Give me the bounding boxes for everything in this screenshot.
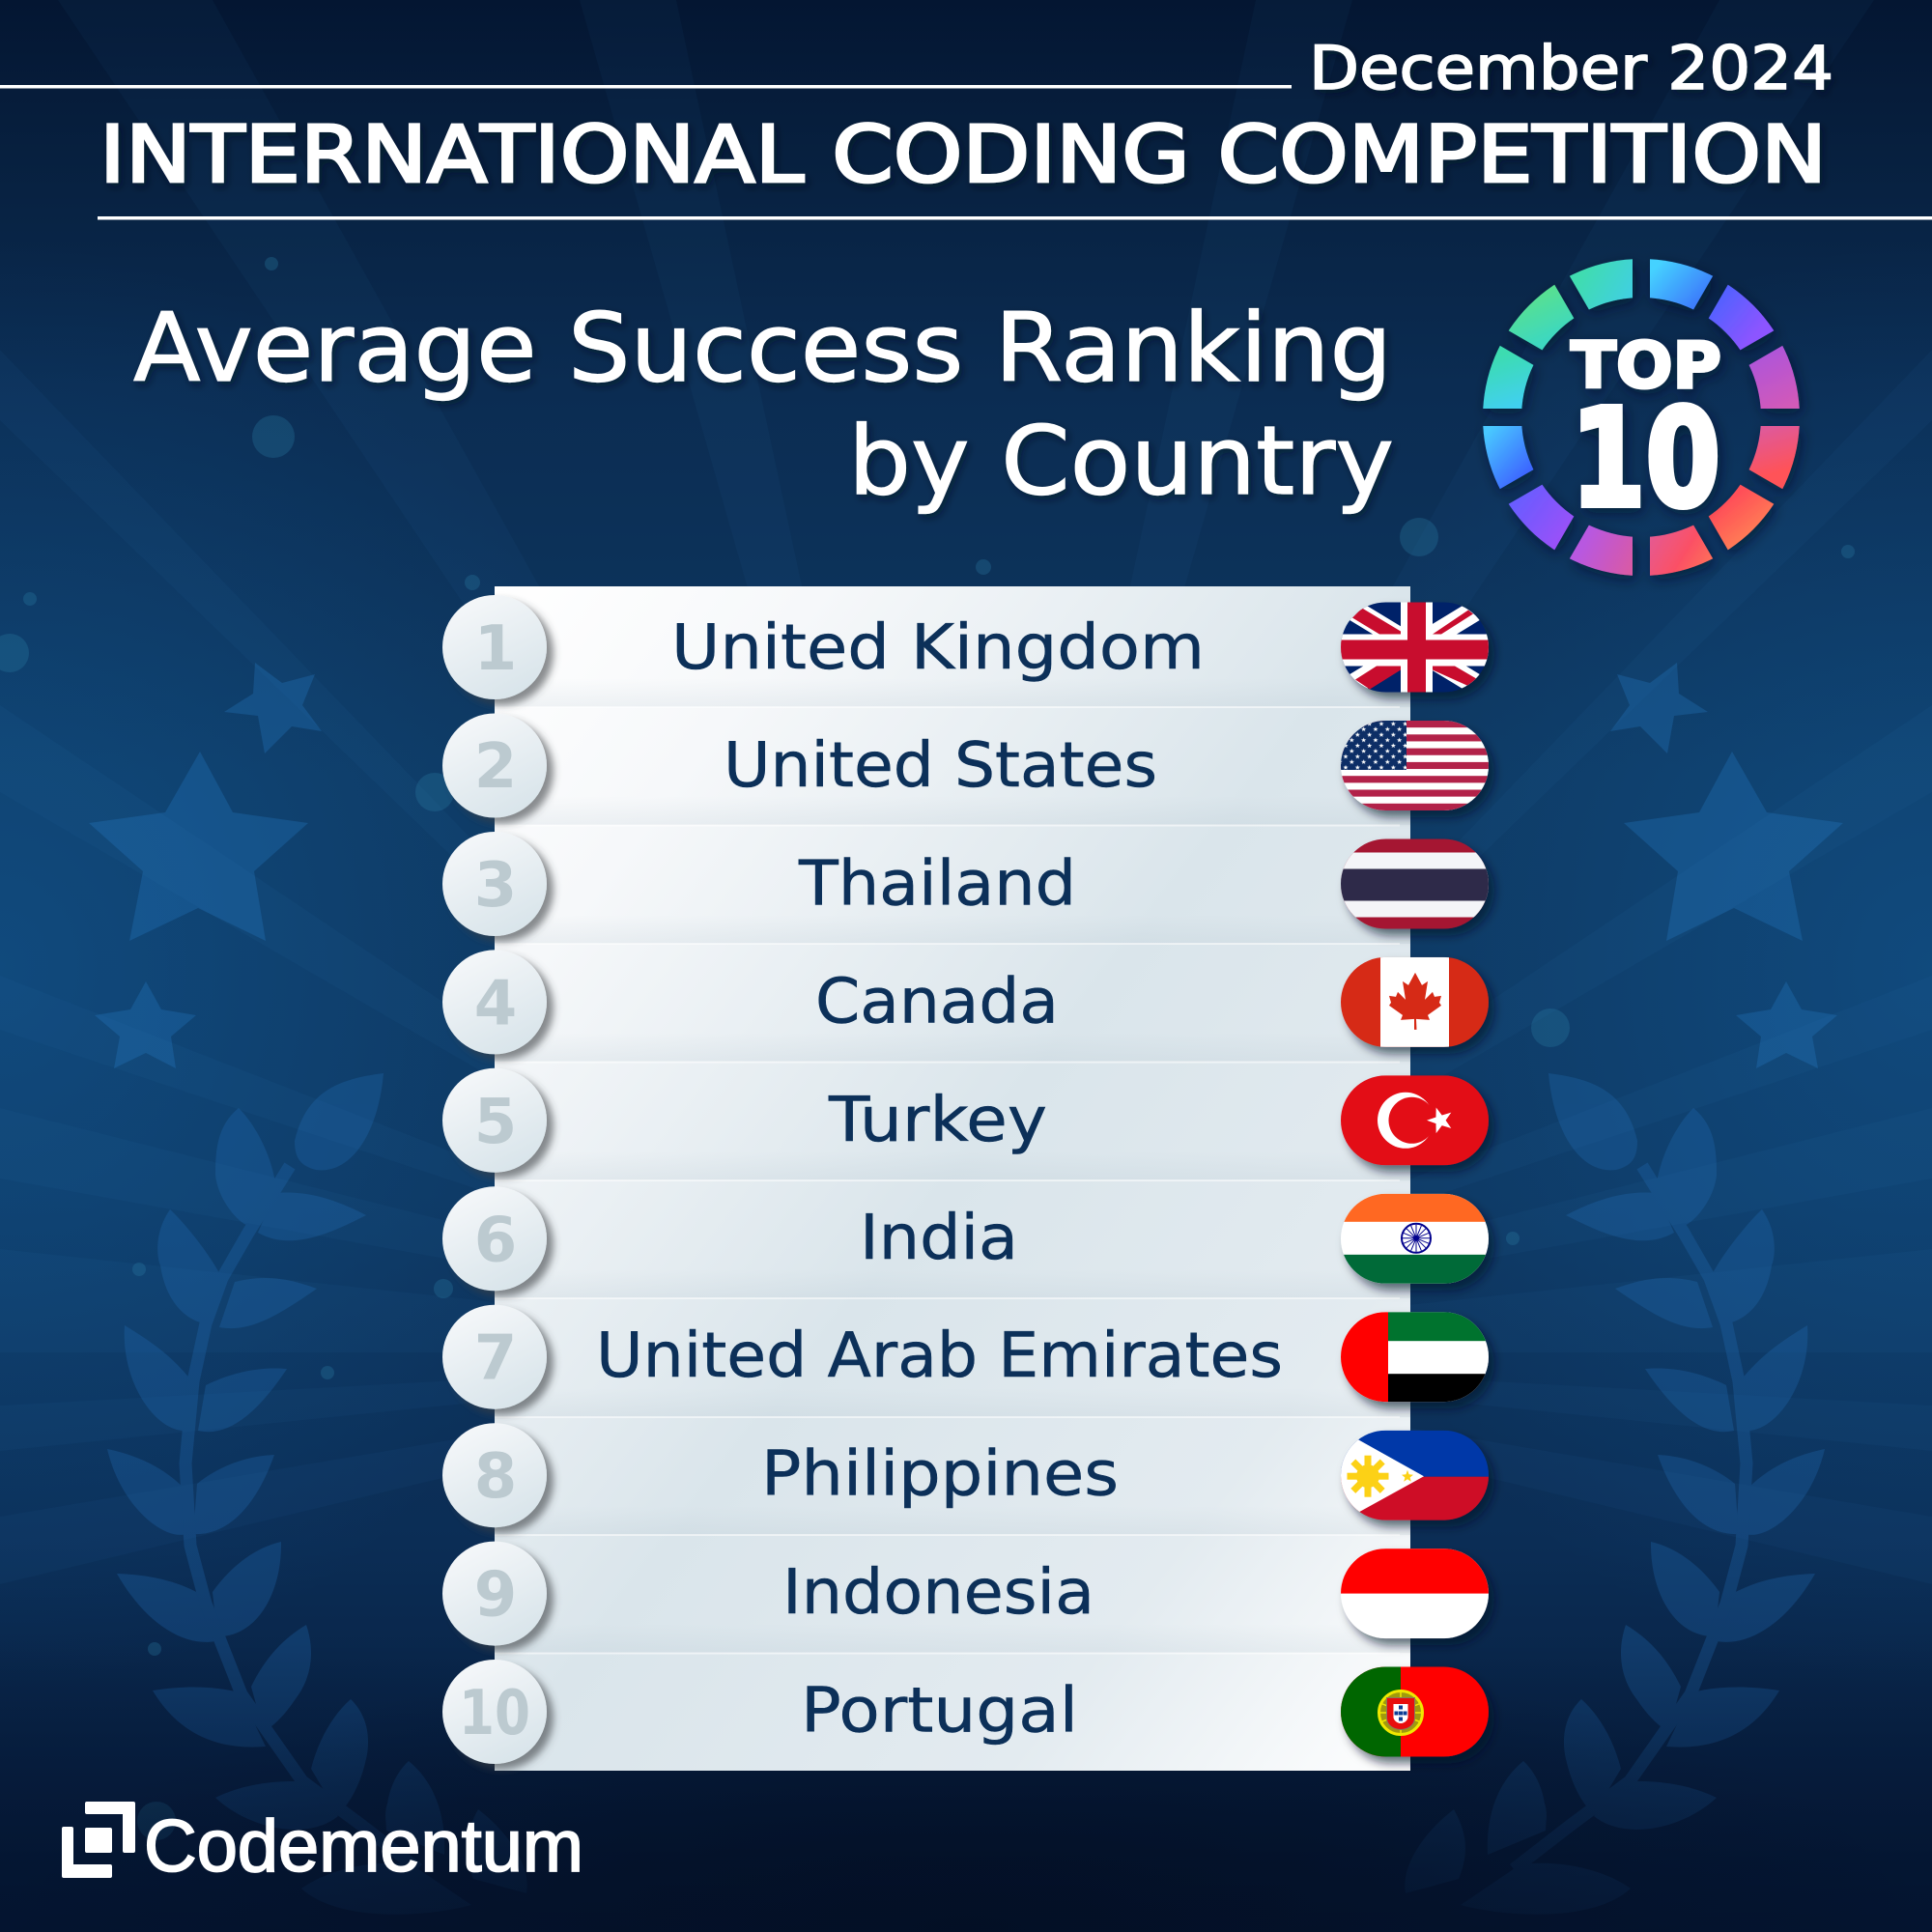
label: Turkey xyxy=(828,1085,1047,1156)
label: Portugal xyxy=(801,1675,1078,1747)
badge text: 10 xyxy=(1571,381,1720,538)
rank 10 xyxy=(442,1660,547,1764)
bottom vignette xyxy=(0,1642,1932,1932)
rank 7: 7 xyxy=(474,1323,517,1395)
flag: Thailand xyxy=(1341,838,1489,929)
rank 8 xyxy=(442,1423,547,1527)
subtitle xyxy=(133,294,1394,517)
label: United Kingdom xyxy=(671,612,1205,684)
rank 6 xyxy=(442,1186,547,1291)
row 8: Philippines xyxy=(442,1423,1489,1527)
flag: United Kingdom xyxy=(1341,603,1489,692)
label: Canada xyxy=(815,966,1059,1037)
rank 1 xyxy=(442,595,547,699)
label: United States xyxy=(724,730,1157,802)
rank 5 xyxy=(442,1068,547,1173)
row 6: India xyxy=(442,1186,1489,1291)
rank 1: 1 xyxy=(474,613,517,685)
badge: top 10 xyxy=(1480,259,1808,586)
logo icon xyxy=(64,1804,133,1876)
badge ring xyxy=(1480,259,1808,586)
row 7: United Arab Emirates xyxy=(442,1305,1489,1409)
title: INTERNATIONAL CODING COMPETITION xyxy=(99,110,1827,201)
rank 8: 8 xyxy=(474,1441,517,1513)
rank 3: 3 xyxy=(474,850,517,922)
rank 4: 4 xyxy=(474,968,517,1039)
logo: Codementum xyxy=(64,1804,583,1888)
panel: ranking list xyxy=(442,586,1489,1771)
date: December 2024 xyxy=(1309,33,1833,103)
subtitle: Average Success Ranking xyxy=(133,294,1392,404)
row 4: Canada xyxy=(442,950,1489,1054)
panel background xyxy=(495,586,1410,1771)
rank 7 xyxy=(442,1305,547,1409)
flag: India xyxy=(1341,1194,1489,1284)
rank 10: 10 xyxy=(459,1678,530,1749)
logo wordmark: Codementum xyxy=(144,1805,583,1888)
rank 9: 9 xyxy=(474,1560,517,1632)
rank 9 xyxy=(442,1542,547,1646)
rank 3 xyxy=(442,832,547,936)
label: Thailand xyxy=(798,848,1076,920)
flag: Canada xyxy=(1341,957,1489,1047)
right laurel and stars xyxy=(1405,663,1843,1915)
row 10: Portugal xyxy=(442,1660,1489,1764)
label: United Arab Emirates xyxy=(596,1321,1283,1392)
label: India xyxy=(860,1203,1018,1274)
left laurel and stars xyxy=(89,663,527,1915)
rank 2: 2 xyxy=(474,731,517,803)
flag: United Arab Emirates xyxy=(1341,1312,1489,1402)
rank 6: 6 xyxy=(474,1205,517,1276)
bottom rule xyxy=(98,216,1932,220)
label: Philippines xyxy=(761,1439,1119,1511)
flag: Portugal xyxy=(1341,1667,1489,1756)
rank 2 xyxy=(442,713,547,817)
flag: United States xyxy=(1341,721,1489,810)
row 9: Indonesia xyxy=(442,1542,1489,1646)
rank 4 xyxy=(442,950,547,1054)
top rule xyxy=(0,85,1292,89)
row 1: United Kingdom xyxy=(442,595,1489,699)
row 5: Turkey xyxy=(442,1068,1489,1173)
rank 5: 5 xyxy=(474,1087,517,1158)
flag: Indonesia xyxy=(1341,1548,1489,1638)
flag: Turkey xyxy=(1341,1075,1489,1165)
row 2: United States xyxy=(442,713,1489,817)
subtitle: by Country xyxy=(848,407,1394,517)
flag: Philippines xyxy=(1341,1430,1489,1522)
row 3: Thailand xyxy=(442,832,1489,936)
label: Indonesia xyxy=(782,1557,1094,1629)
badge text xyxy=(1571,328,1721,538)
badge text: TOP xyxy=(1571,328,1721,403)
